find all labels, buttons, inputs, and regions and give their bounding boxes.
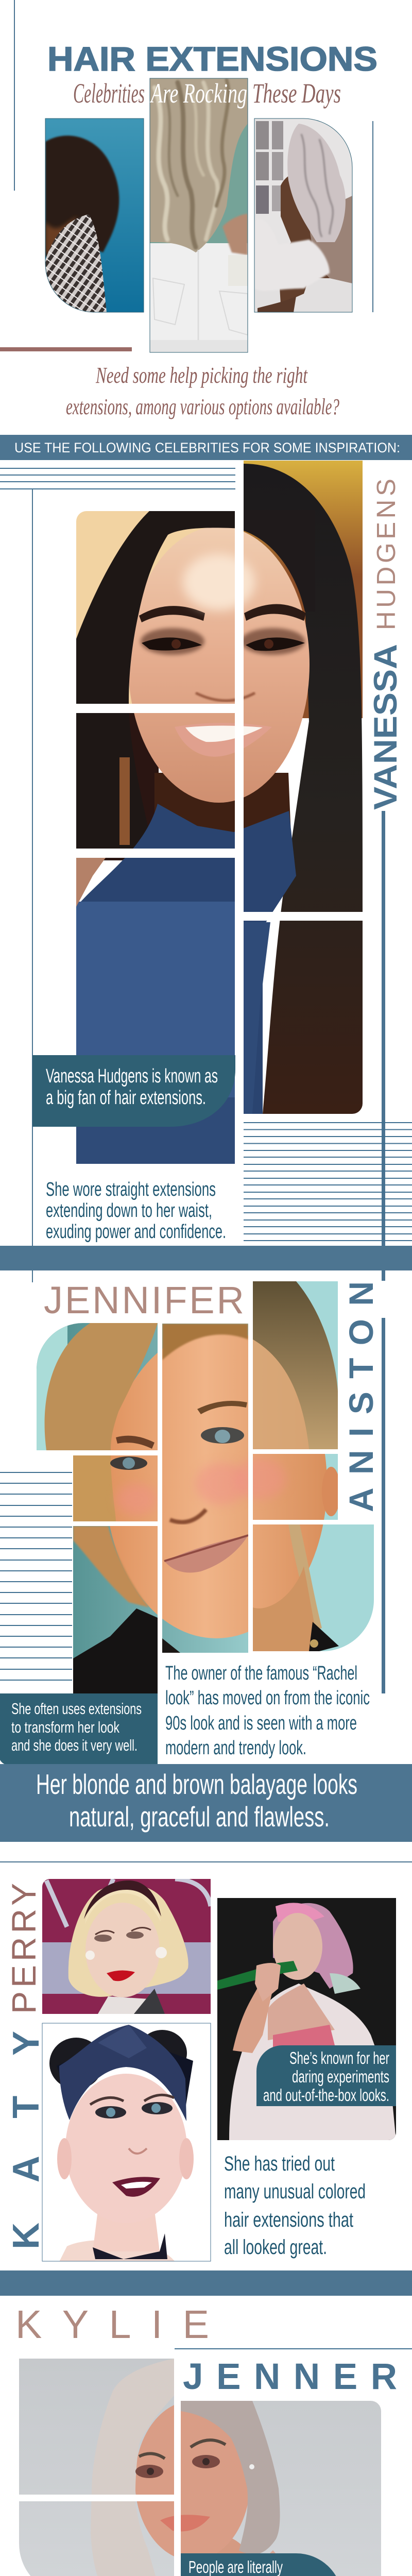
photo outline: Katy headband [42, 2023, 211, 2261]
text: straight extensions [46, 1179, 226, 1243]
title: HAIR EXTENSIONS [47, 40, 377, 78]
subtitle: Celebrities Are Rocking These Days: Are Rocking [150, 78, 247, 109]
decorative rule: Jennifer right [382, 1318, 385, 1693]
photo: Katy Perry navy headband [49, 2025, 194, 2261]
callout: big fan [32, 1055, 235, 1127]
question text [66, 363, 339, 419]
decorative rule: Vanessa right [382, 811, 385, 1281]
name: Katy: KATY [6, 2031, 47, 2249]
text: Rachel look [165, 1663, 370, 1759]
callout: transforms her look [0, 1693, 158, 1765]
text: straight extensions: exuding power and confidence. [46, 1221, 226, 1243]
photo: Katy Perry on stage [216, 1898, 396, 2140]
decorative rule: top left vertical [14, 0, 15, 191]
name: Aniston: ANISTON [342, 1281, 380, 1512]
text: unusual colored extensions: She has tried out [224, 2153, 335, 2175]
subtitle: Celebrities Are Rocking These Days [73, 78, 341, 109]
callout: big fan: Vanessa Hudgens is known as [46, 1065, 218, 1087]
decorative rule [175, 2348, 412, 2349]
decorative rule [0, 1861, 412, 1862]
text: unusual colored extensions: all looked great. [224, 2236, 327, 2259]
name: Jennifer: JENNIFER [44, 1279, 244, 1321]
text: straight extensions: She wore straight extensions [46, 1179, 216, 1200]
text: Rachel look: modern and trendy look. [165, 1737, 306, 1759]
hero photo: long wavy blonde hair and white jeans [150, 78, 248, 352]
callout: big fan: a big fan of hair extensions. [46, 1087, 206, 1109]
hero photo: silver curly hair and white dog [254, 118, 352, 312]
banner: blonde and brown balayage [0, 1764, 412, 1842]
text: straight extensions: extending down to her waist, [46, 1200, 212, 1222]
name: Hudgens: HUDGENS [371, 479, 401, 630]
callout: transforms her look: to transform her look [11, 1718, 119, 1736]
callout: daring experiments [256, 2045, 396, 2106]
callout: transforms her look: and she does it very well. [11, 1736, 138, 1754]
name: Vanessa: VANESSA [368, 644, 404, 810]
banner: divider 2 [0, 2270, 412, 2296]
hero outlines [45, 78, 352, 352]
text: unusual colored extensions [224, 2153, 366, 2259]
banner: divider 1 [0, 1246, 412, 1270]
text: unusual colored extensions: hair extensions that [224, 2209, 353, 2231]
name: Perry: PERRY [5, 1883, 43, 2014]
decorative rule: Vanessa left [32, 489, 33, 1282]
decorative bar: brown [0, 347, 132, 351]
photo panels: Vanessa Hudgens [76, 461, 363, 1164]
decorative rule: right vertical [372, 121, 373, 312]
subtitle: Celebrities Are Rocking These Days: These Days [252, 78, 341, 109]
name: Jenner: JENNER [183, 2357, 397, 2397]
photo panels: Kylie Jenner [19, 2359, 381, 2576]
photo panels: Jennifer Aniston [37, 1281, 374, 1693]
hero photo: curly hair on blue wall [45, 118, 144, 312]
callout: transforms her look: She often uses extensions [11, 1700, 142, 1718]
decorative stripes: Vanessa right [244, 1123, 412, 1241]
decorative stripes: Jennifer left [0, 1472, 72, 1680]
banner: use the following celebrities [0, 435, 412, 460]
name: Kylie: KYLIE [15, 2302, 209, 2347]
decorative stripes: Vanessa top [0, 468, 235, 489]
question text: Need some help picking the right [95, 363, 308, 388]
callout: literally obsessed: People are literally [188, 2557, 283, 2576]
photo: Katy Perry blonde bob [42, 1879, 211, 2014]
subtitle: Celebrities Are Rocking These Days: Celebrities [73, 78, 145, 109]
